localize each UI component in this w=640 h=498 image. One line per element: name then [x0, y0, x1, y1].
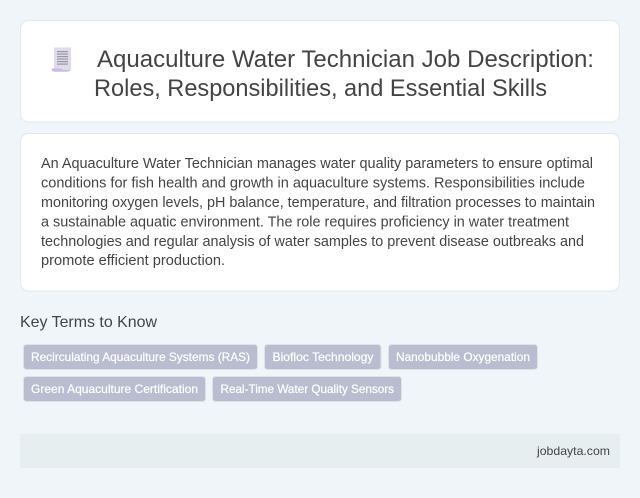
panel: description card	[20, 134, 620, 291]
text block: description: promote efficient production.	[41, 253, 225, 269]
heading: key terms: Key Terms to Know	[20, 314, 157, 331]
tag: biofloc technology	[264, 344, 381, 370]
panel: title card	[20, 20, 620, 122]
tag: green aquaculture certification	[24, 376, 206, 402]
tag: recirculating aquaculture systems: Recirculating Aquaculture Systems (RAS)	[31, 350, 250, 364]
text block: description: An Aquaculture Water Technician manages water quality parameters to ensure optimal	[41, 156, 593, 172]
text block: description: monitoring oxygen levels, pH balance, temperature, and filtration processes to maintain	[41, 195, 595, 211]
tag: nanobubble oxygenation	[388, 344, 538, 370]
title: Roles, Responsibilities, and Essential Skills	[94, 75, 547, 102]
text block: description: technologies and regular analysis of water samples to prevent disease outbreaks and	[41, 234, 584, 250]
tag: real-time water quality sensors: Real-Time Water Quality Sensors	[220, 382, 394, 396]
footer bar: jobdayta.com	[536, 444, 610, 458]
tag: nanobubble oxygenation: Nanobubble Oxygenation	[396, 350, 530, 364]
footer bar	[20, 434, 620, 468]
text block: description: conditions for fish health and growth in aquaculture systems. Responsibilities include	[41, 176, 585, 192]
text block: description: a sustainable aquatic environment. The role requires proficiency in water treatment	[41, 214, 569, 230]
tag: recirculating aquaculture systems	[24, 344, 258, 370]
title	[94, 46, 594, 102]
tag: green aquaculture certification: Green Aquaculture Certification	[31, 382, 198, 396]
icon: document scroll	[52, 48, 71, 72]
text block: description	[41, 156, 595, 269]
tag: real-time water quality sensors	[212, 376, 402, 402]
title: Aquaculture Water Technician Job Description:	[97, 46, 594, 73]
tag: biofloc technology: Biofloc Technology	[272, 350, 374, 364]
